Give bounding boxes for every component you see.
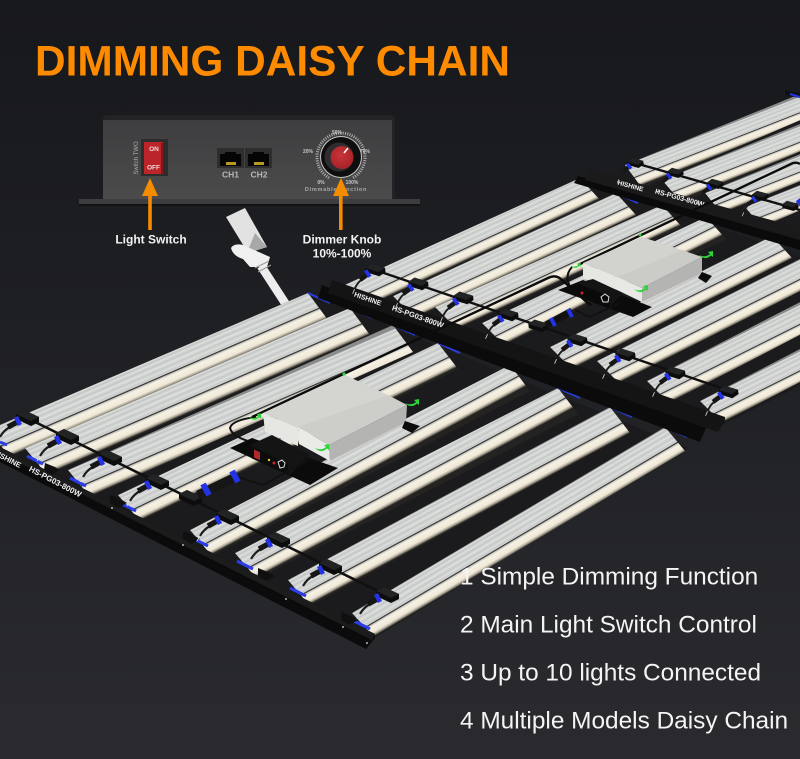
panel: near fixture bars (0, 293, 688, 638)
near fixture connectors (0, 410, 399, 619)
arrow: to dimmer knob (333, 178, 349, 230)
panel: middle rails (318, 280, 725, 442)
arrow: to light switch (142, 178, 158, 230)
icon: CH1 port (217, 148, 244, 168)
feature list (460, 564, 788, 734)
port labels: CH1 (222, 170, 239, 180)
panel: far fixture bars (600, 90, 800, 245)
dial labels (303, 130, 371, 193)
panel: near power supply (230, 372, 420, 485)
feature 2: 2 Main Light Switch Control (460, 612, 757, 638)
panel: middle power supply (558, 234, 713, 317)
bar end caps: blue (580, 178, 794, 246)
dial labels: 20% (303, 149, 314, 155)
near inline connector (198, 459, 310, 495)
icon: light switch (141, 139, 168, 176)
title: DIMMING DAISY CHAIN (35, 38, 510, 86)
icon: light switch: OFF (147, 164, 160, 172)
feature 3: 3 Up to 10 lights Connected (460, 660, 761, 686)
panel: near rail (0, 442, 375, 649)
icon: ethernet cable (226, 208, 287, 306)
far fixture connectors (613, 156, 800, 216)
panel: control box (79, 115, 420, 206)
rail model: HS-PG03-800W (654, 188, 705, 209)
label: dimmer knob (303, 232, 381, 260)
rail model: HS-PG03-800W (27, 464, 83, 499)
label: dimmer knob: Dimmer Knob (303, 232, 381, 246)
label: light switch: Light Switch (115, 232, 187, 246)
cable: daisy chain far (578, 163, 800, 265)
label: dimmer knob: 10%-100% (313, 246, 372, 260)
dial labels: 100% (346, 180, 359, 186)
middle inline connector (546, 303, 620, 326)
cable: daisy chain near (252, 276, 590, 417)
feature 4: 4 Multiple Models Daisy Chain (460, 708, 788, 734)
rail label: HISHINE (353, 292, 382, 308)
feature 1: 1 Simple Dimming Function (460, 564, 758, 590)
switch caption: Switch TWO (134, 141, 140, 175)
dial labels: Dimmable function (305, 187, 367, 193)
icon: dimmer knob (317, 133, 365, 178)
port labels: CH2 (250, 170, 268, 180)
dial labels: 0% (317, 180, 325, 186)
panel: far rail (574, 170, 800, 250)
dial labels: 50% (332, 130, 343, 136)
icon: light switch: ON (149, 146, 159, 153)
panel: middle fixture bars (340, 178, 800, 425)
bar end caps: blue (308, 293, 687, 437)
port labels (222, 170, 268, 180)
icon: CH2 port (245, 148, 272, 168)
rail label: HISHINE (617, 180, 645, 194)
rail model: HS-PG03-800W (391, 303, 446, 330)
middle fixture connectors (349, 262, 741, 416)
dial labels: 70% (360, 149, 371, 155)
